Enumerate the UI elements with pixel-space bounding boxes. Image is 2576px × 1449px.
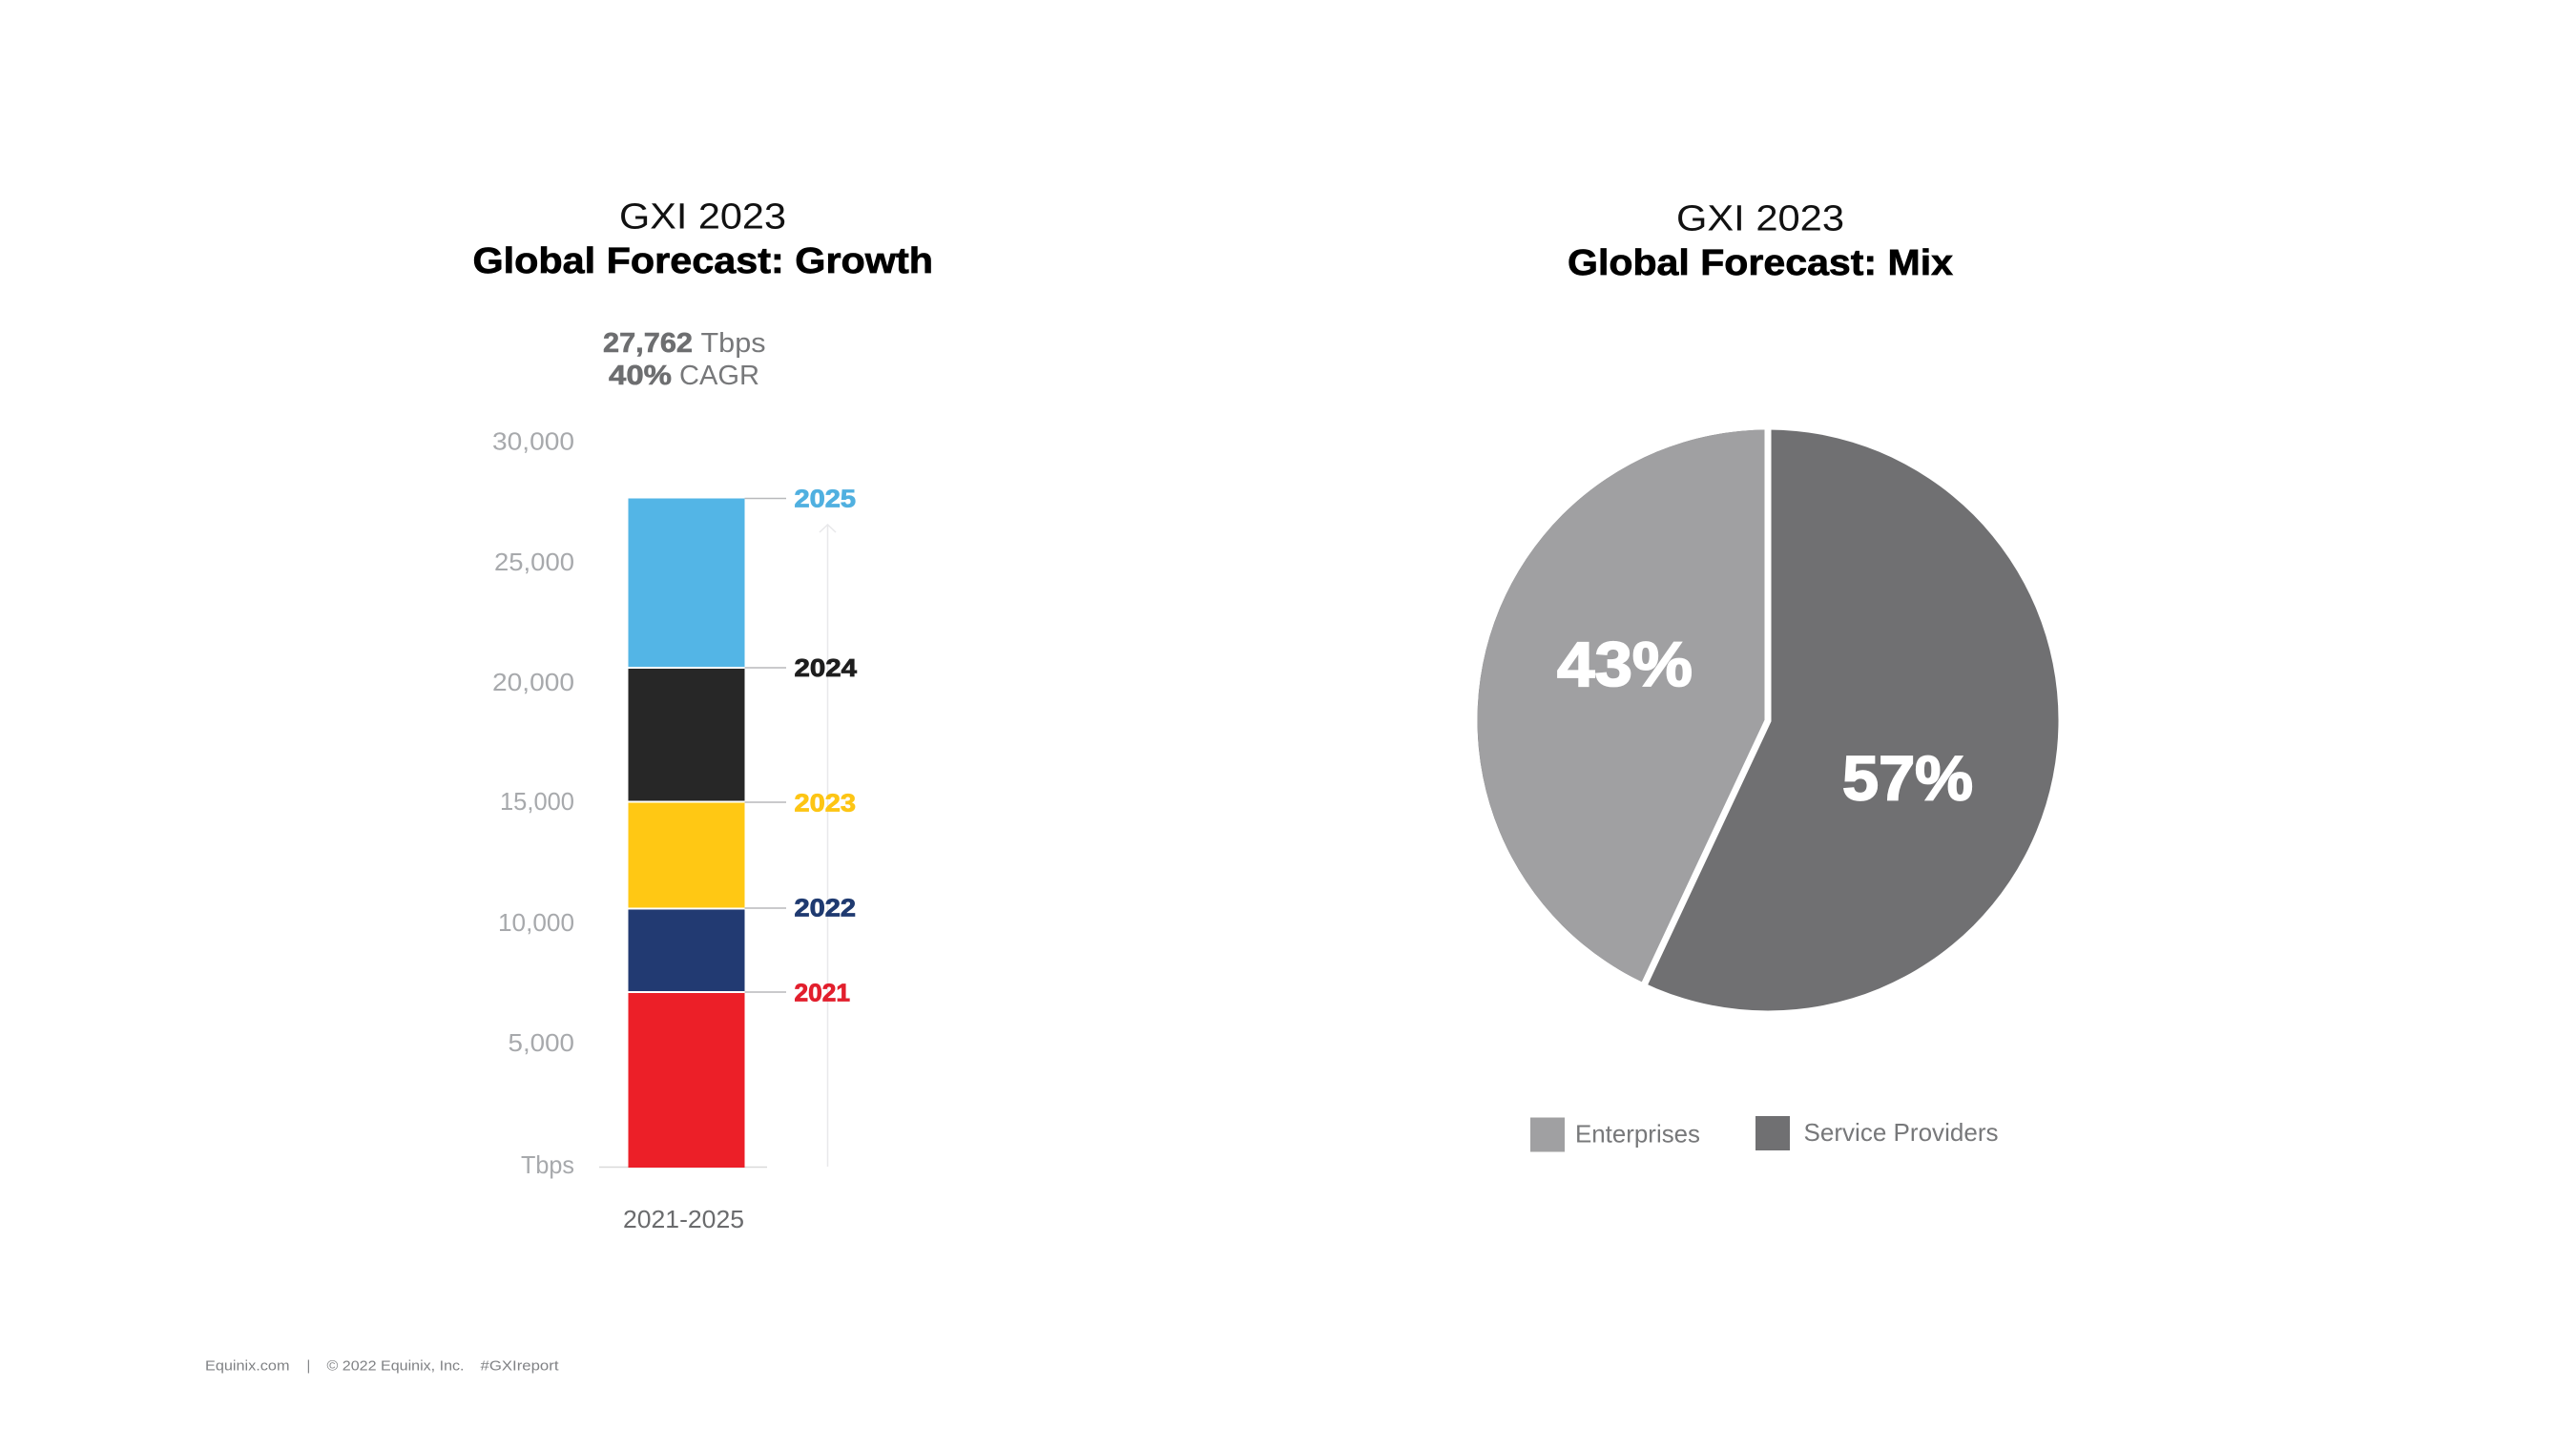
arrow: growth direction	[820, 525, 836, 1167]
heading: mix title	[1568, 198, 1953, 283]
pie label: service providers share: 57%	[1842, 742, 1973, 813]
year labels: 2022	[794, 895, 856, 921]
year labels	[794, 486, 858, 1007]
y axis labels: 30,000	[492, 427, 574, 456]
x axis baseline	[599, 1166, 767, 1168]
heading: growth title	[473, 197, 933, 281]
year leader lines	[744, 498, 786, 992]
y axis labels: 20,000	[492, 668, 574, 696]
text block: total and CAGR: CAGR	[679, 361, 759, 391]
y axis labels: 5,000	[508, 1028, 574, 1057]
y axis labels: 25,000	[494, 548, 574, 576]
footer: © 2022 Equinix, Inc.	[326, 1358, 464, 1374]
heading: mix title: GXI 2023	[1676, 198, 1844, 238]
heading: growth title: GXI 2023	[619, 197, 786, 237]
y axis labels	[492, 427, 574, 1179]
legend: enterprises: Enterprises	[1575, 1120, 1700, 1149]
footer: Equinix.com	[205, 1358, 290, 1374]
footer: #GXIreport	[481, 1358, 559, 1374]
text block: total and CAGR	[603, 328, 765, 391]
year labels: 2025	[794, 486, 856, 513]
footer: |	[307, 1358, 310, 1374]
legend: service providers	[1755, 1116, 1998, 1150]
legend: service providers: Service Providers	[1803, 1118, 1998, 1147]
legend: enterprises	[1530, 1118, 1700, 1152]
pie chart	[1477, 424, 2059, 1011]
y axis labels: 10,000	[498, 908, 574, 937]
footer	[205, 1358, 559, 1374]
heading: mix title: Global Forecast: Mix	[1568, 243, 1953, 283]
text block: total and CAGR: 40%	[609, 361, 672, 391]
text block: total and CAGR: 27,762	[603, 328, 693, 359]
year labels: 2021	[794, 981, 850, 1007]
text block: total and CAGR: Tbps	[700, 328, 765, 359]
x axis label: 2021-2025	[623, 1205, 744, 1233]
pie label: enterprises share: 43%	[1557, 629, 1693, 699]
y axis labels: 15,000	[500, 787, 574, 816]
y axis labels: Tbps	[521, 1150, 574, 1179]
heading: growth title: Global Forecast: Growth	[473, 241, 933, 281]
stacked bar chart	[628, 498, 744, 1168]
legend	[1530, 1116, 1998, 1152]
year labels: 2023	[794, 790, 856, 817]
year labels: 2024	[794, 655, 858, 682]
